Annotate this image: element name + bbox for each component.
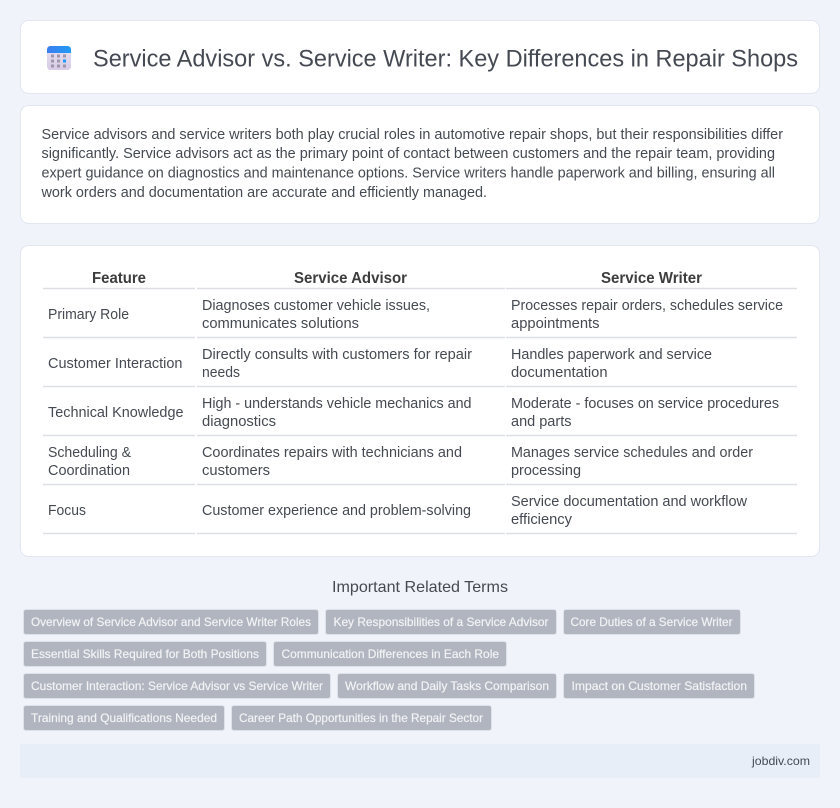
intro paragraph: significantly. Service advisors act as the primary point of contact between customers and the repair team, providing — [42, 146, 775, 162]
row: scheduling and coordination: Manages service schedules and order — [511, 445, 753, 461]
heading: important related terms: Important Related Terms — [332, 579, 508, 596]
panel: header — [20, 20, 820, 94]
row: focus: Customer experience and problem-solving — [202, 503, 471, 519]
row: technical knowledge: and parts — [511, 414, 572, 430]
icon: calendar — [47, 46, 71, 70]
row: focus: efficiency — [511, 512, 573, 528]
row: technical knowledge: Technical Knowledge — [48, 405, 184, 421]
row: technical knowledge: diagnostics — [202, 414, 276, 430]
row: scheduling and coordination: Coordinates repairs with technicians and — [202, 445, 462, 461]
tag — [24, 610, 318, 634]
row: scheduling and coordination: Coordination — [48, 463, 130, 479]
intro paragraph — [40, 127, 783, 201]
panel: introduction — [20, 106, 820, 224]
intro paragraph: work orders and documentation are accurate and efficiently managed. — [40, 185, 487, 201]
row: technical knowledge: Moderate - focuses on service procedures — [511, 396, 779, 412]
tag — [24, 642, 266, 666]
intro paragraph: Service advisors and service writers both play crucial roles in automotive repair shops, but their responsibilities differ — [42, 127, 783, 143]
row: primary role: Primary Role — [48, 307, 129, 323]
row: primary role: Diagnoses customer vehicle issues, — [202, 298, 430, 314]
row: customer interaction: Customer Interaction — [48, 356, 182, 372]
tag — [564, 610, 740, 634]
table header row: Service Advisor — [294, 270, 407, 287]
tag — [24, 674, 330, 698]
row: technical knowledge — [43, 396, 797, 436]
row: scheduling and coordination: customers — [202, 463, 270, 479]
row: customer interaction: Handles paperwork and service — [511, 347, 712, 363]
row: scheduling and coordination — [43, 445, 797, 484]
row: focus: Service documentation and workflow — [511, 494, 748, 510]
row: customer interaction — [43, 347, 797, 386]
intro paragraph: expert guidance on diagnostics and maintenance options. Service writers handle paperwork and billing, ensuring all — [42, 166, 775, 182]
tag — [24, 706, 224, 730]
footer — [20, 744, 820, 778]
tag — [564, 674, 754, 698]
tag: Training and Qualifications Needed — [31, 711, 217, 725]
row: primary role: appointments — [511, 316, 600, 332]
row: customer interaction: needs — [202, 365, 240, 381]
row: scheduling and coordination: processing — [511, 463, 581, 479]
row: technical knowledge: High - understands vehicle mechanics and — [202, 396, 472, 412]
footer: jobdiv.com — [751, 754, 810, 768]
row: primary role — [43, 298, 797, 338]
row: focus — [43, 494, 797, 534]
tag — [274, 642, 506, 666]
table header row: Feature — [92, 270, 146, 287]
row: customer interaction: documentation — [511, 365, 608, 381]
tag: Communication Differences in Each Role — [282, 647, 499, 661]
row: primary role: Processes repair orders, schedules service — [511, 298, 783, 314]
tag — [338, 674, 556, 698]
tag — [232, 706, 492, 730]
tag: Overview of Service Advisor and Service Writer Roles — [31, 615, 311, 629]
row: scheduling and coordination: Scheduling & — [48, 445, 131, 461]
tag: Essential Skills Required for Both Positions — [31, 647, 259, 661]
row: primary role: communicates solutions — [202, 316, 359, 332]
row: customer interaction: Directly consults with customers for repair — [202, 347, 472, 363]
tag: Key Responsibilities of a Service Advisor — [334, 615, 548, 629]
panel: related term tags — [24, 610, 754, 730]
tag: Career Path Opportunities in the Repair Sector — [239, 711, 483, 725]
tag: Workflow and Daily Tasks Comparison — [345, 679, 549, 693]
table header row — [43, 270, 797, 288]
panel: comparison table — [20, 246, 820, 556]
title: Service Advisor vs. Service Writer: Key Differences in Repair Shops — [93, 46, 798, 72]
table header row: Service Writer — [601, 270, 702, 287]
tag: Impact on Customer Satisfaction — [572, 679, 747, 693]
tag: Customer Interaction: Service Advisor vs Service Writer — [31, 679, 323, 693]
tag: Core Duties of a Service Writer — [570, 615, 732, 629]
row: focus: Focus — [48, 503, 86, 519]
tag — [326, 610, 556, 634]
